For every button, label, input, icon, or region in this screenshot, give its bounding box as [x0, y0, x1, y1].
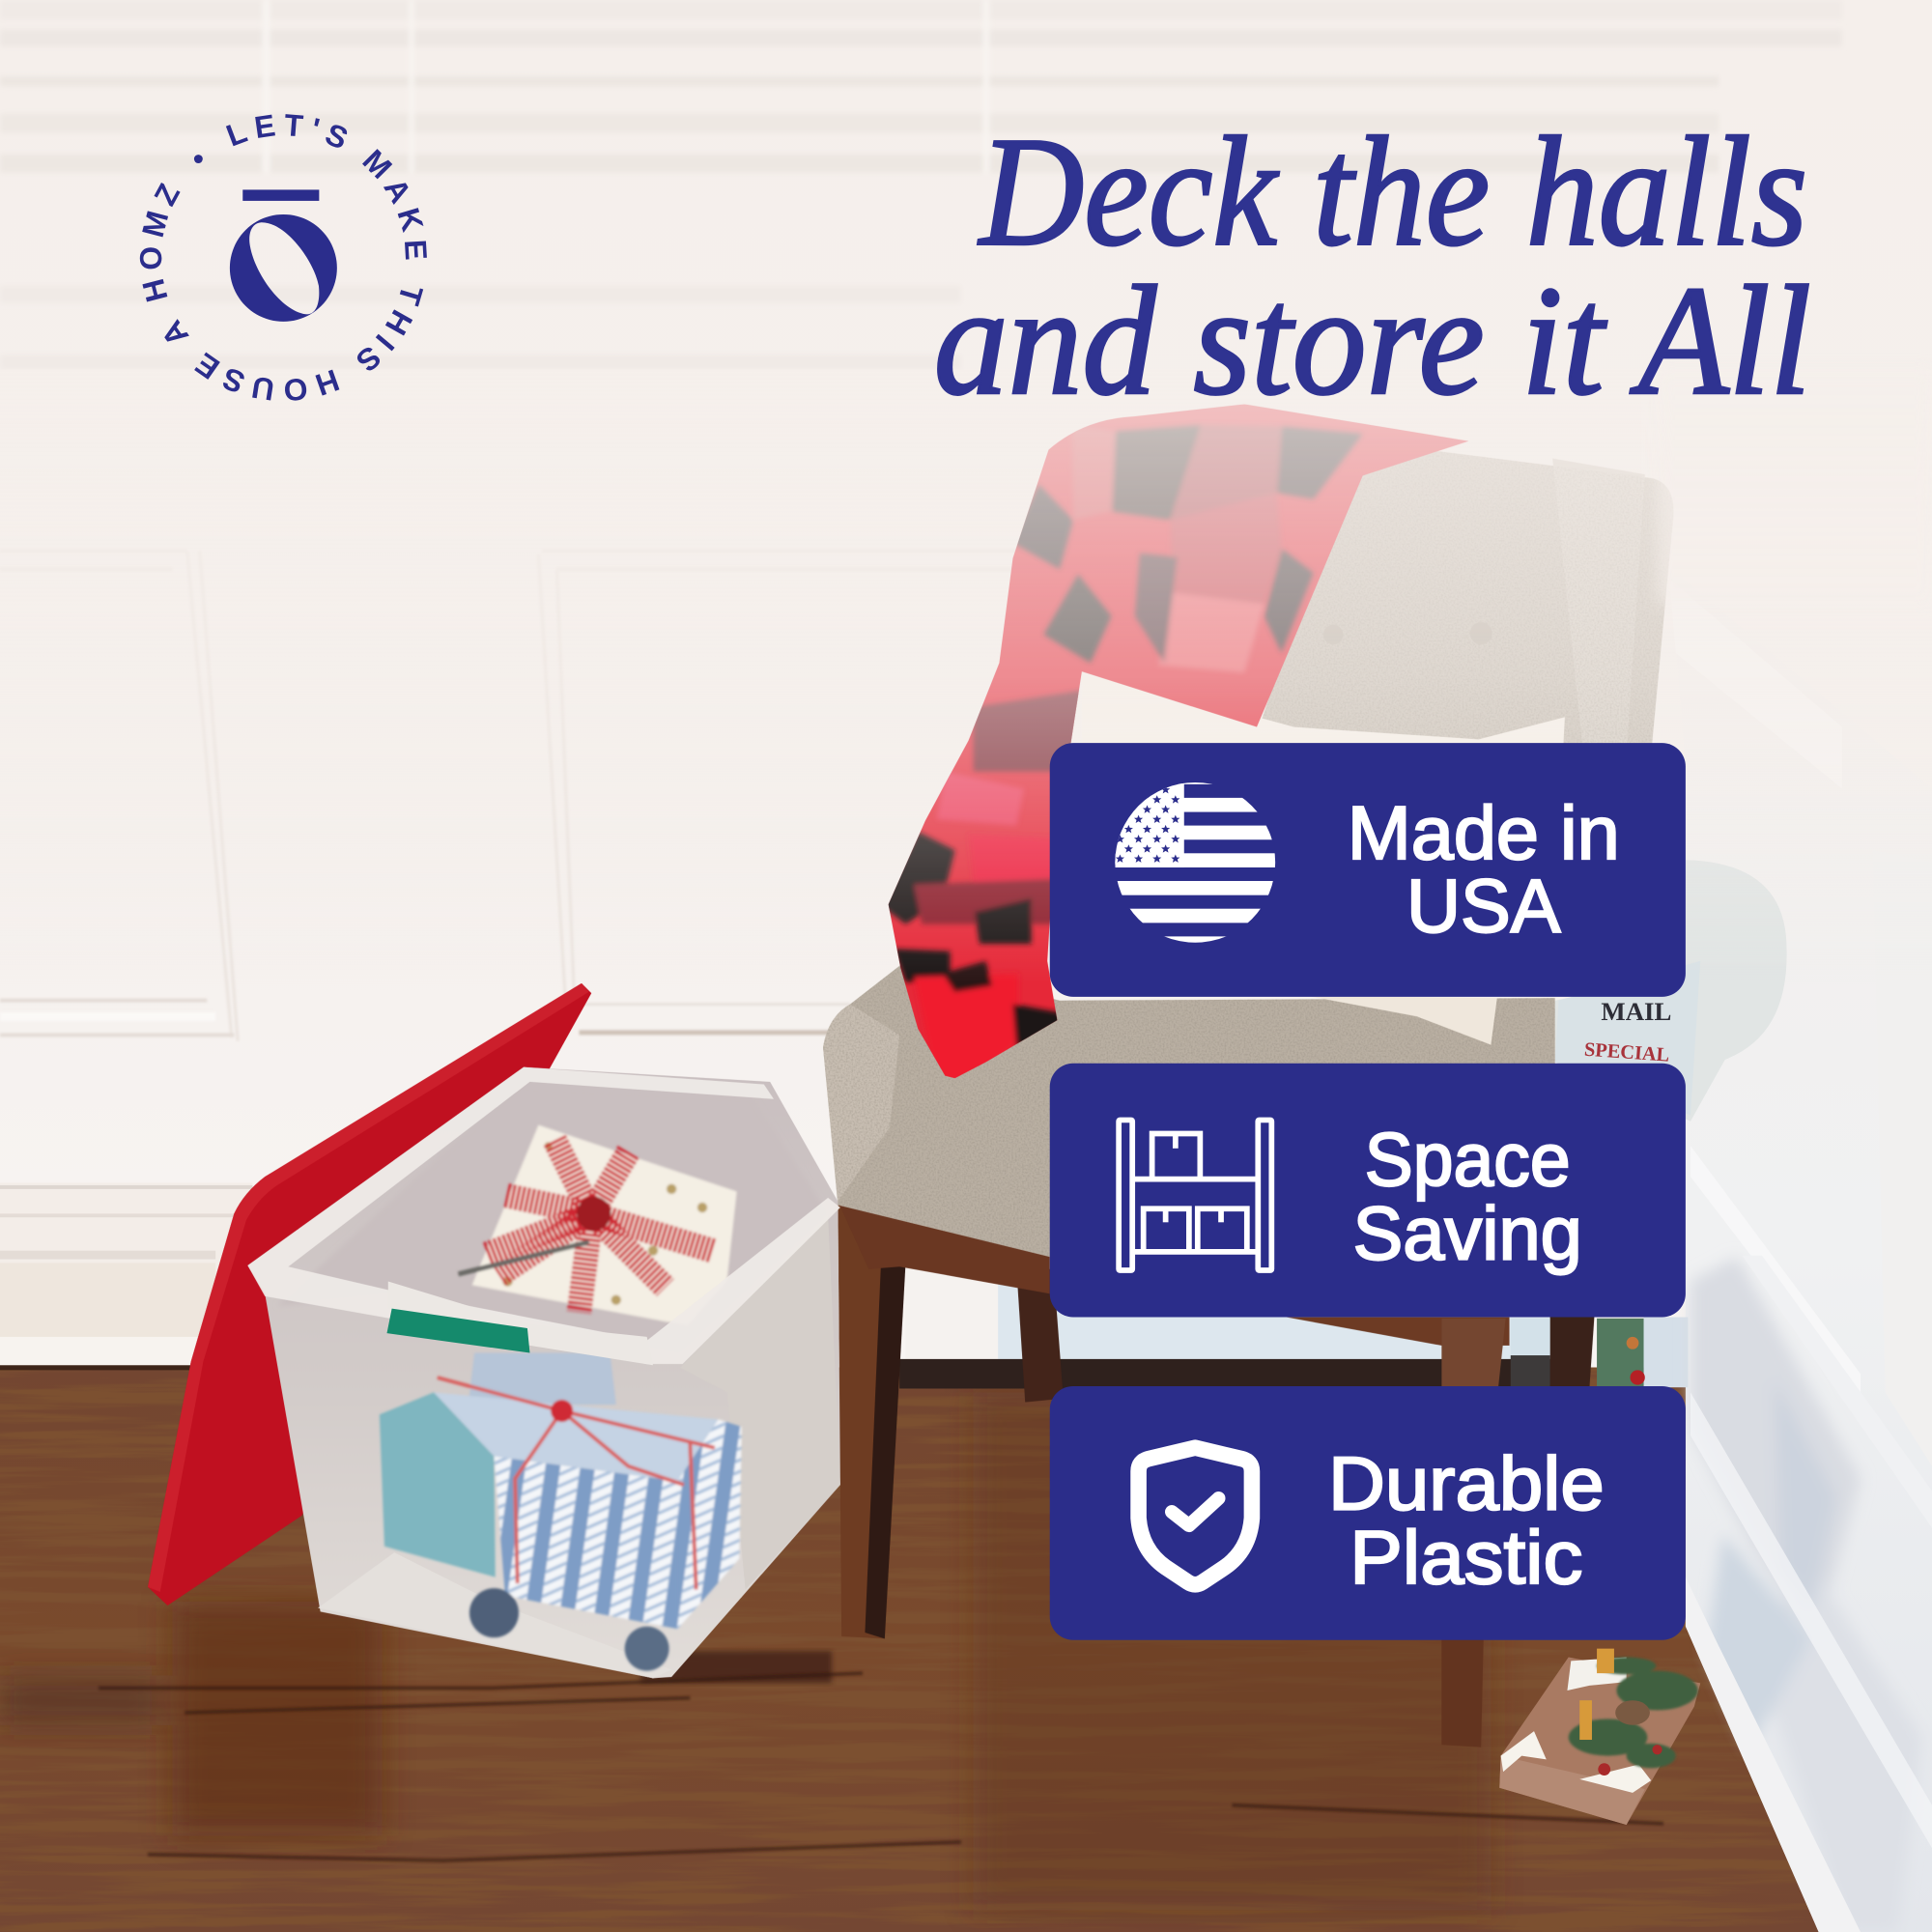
label: Made in USA: USA [1406, 865, 1561, 948]
red lid [148, 983, 591, 1605]
title: and store it All [934, 255, 1811, 428]
label: Durable Plastic: Durable [1328, 1442, 1605, 1525]
label: Made in USA: Made in [1348, 792, 1620, 875]
icon: shield with check [1139, 1448, 1252, 1584]
plaid blanket [863, 394, 1479, 1084]
right wall [1644, 567, 1932, 1932]
bin body [247, 1067, 840, 1678]
white pillow [1082, 669, 1565, 764]
badge: Made in USA [1050, 743, 1686, 997]
badge: Space Saving [1050, 1064, 1686, 1318]
logo letter o [230, 214, 337, 322]
mailbox [1555, 860, 1787, 1122]
lower gift [380, 1353, 742, 1671]
label: Durable Plastic: Plastic [1350, 1517, 1582, 1600]
seat and arm [823, 961, 1555, 1260]
baseboard [0, 1182, 1565, 1368]
bin front rim [247, 1067, 840, 1364]
chair [823, 448, 1673, 1747]
logo dot [194, 155, 203, 163]
wall panel mouldings [0, 551, 1023, 1041]
label: Durable Plastic [1328, 1442, 1605, 1600]
badge: Durable Plastic [1050, 1386, 1686, 1640]
upper gift with red bow [458, 1125, 737, 1325]
rear and front legs [1016, 1269, 1064, 1403]
title: Deck the halls [978, 106, 1807, 279]
label: Space Saving: Saving [1353, 1193, 1582, 1276]
storage bin with red lid [148, 983, 840, 1678]
title [934, 106, 1811, 428]
label: Space Saving: Space [1365, 1119, 1571, 1202]
plaid reflections on wainscot [1690, 1257, 1922, 1932]
wood floor [0, 1359, 1932, 1932]
logo ring text: LET'S MAKE THIS HOUSE A HOMZ [139, 114, 427, 401]
label: Made in USA [1348, 792, 1620, 948]
wall strip beside garland [1644, 1318, 1688, 1387]
top fade over photo [0, 370, 1932, 985]
floor reflections [0, 1392, 1491, 1910]
icon: storage shelves [1119, 1120, 1271, 1270]
logo: circular badge [139, 114, 427, 401]
holiday garland and ornament house [1499, 1319, 1700, 1825]
wall [0, 0, 1932, 1380]
mailbox: SPECIAL [1583, 1039, 1670, 1066]
green latch [387, 1309, 529, 1353]
label: Space Saving [1353, 1119, 1582, 1276]
icon: american flag [1115, 782, 1275, 943]
logo bar [242, 189, 319, 201]
mailbox: MAIL [1601, 997, 1671, 1026]
window blinds [0, 0, 1842, 370]
